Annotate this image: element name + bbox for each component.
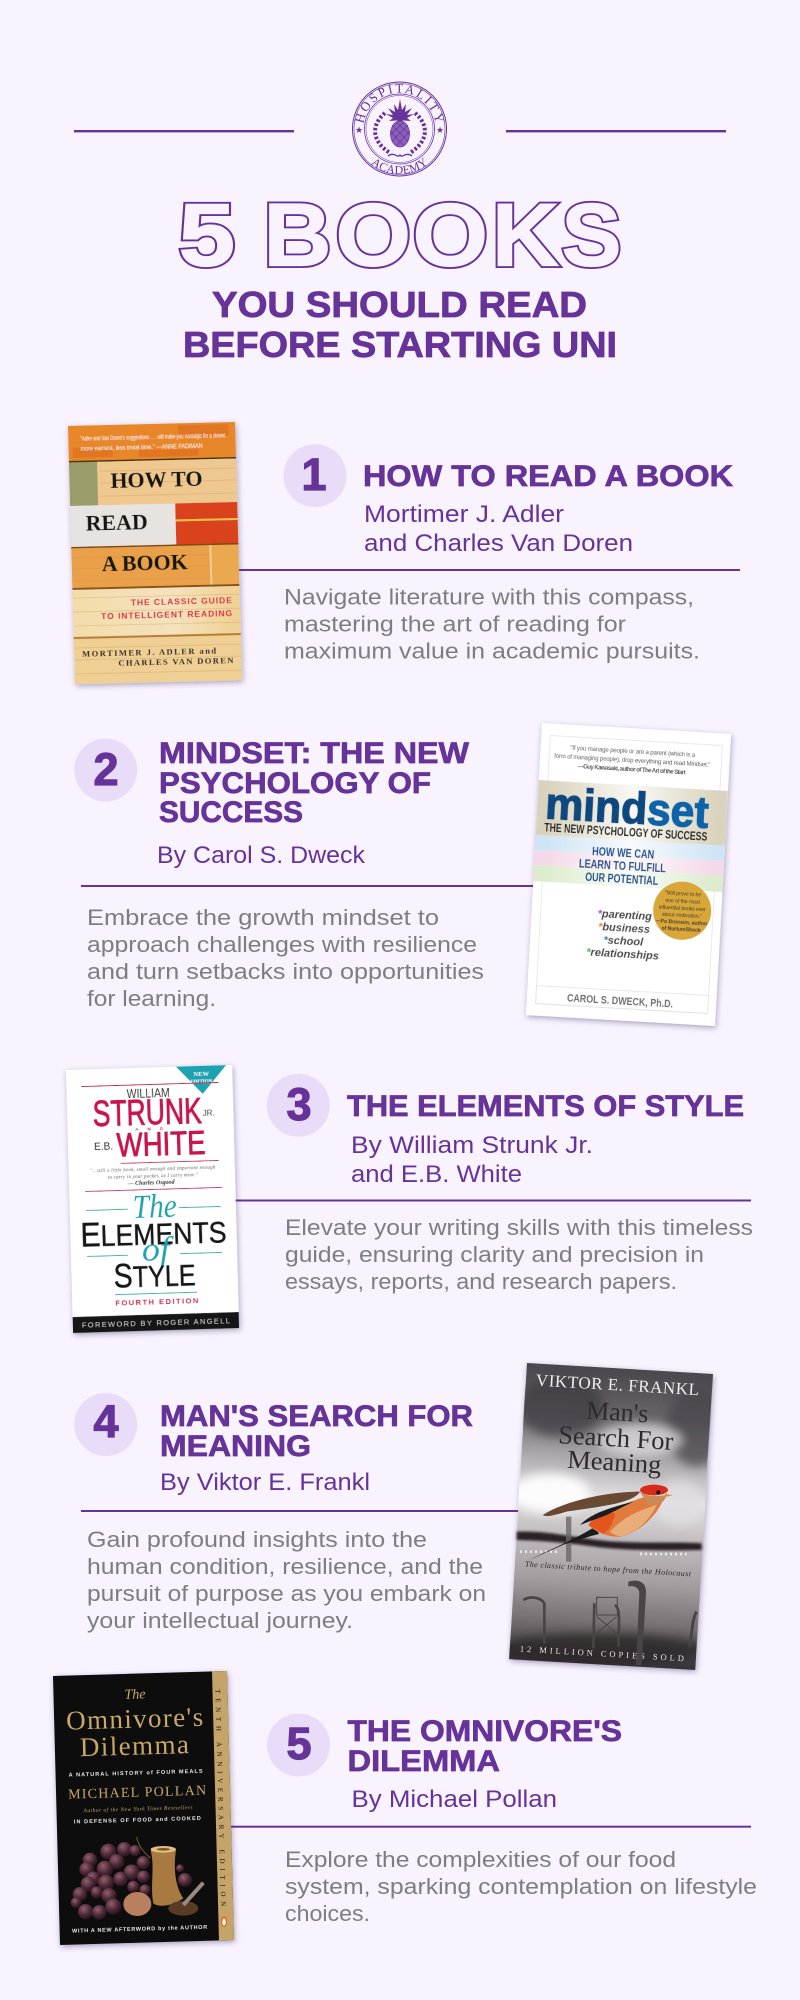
book cover: The Elements of Style: EDITION: [191, 1080, 213, 1085]
author 5: By Michael Pollan: [352, 1786, 557, 1813]
title: 5 BOOKS: K: [492, 184, 559, 284]
book cover: How to Read a Book: THE CLASSIC GUIDE: [131, 595, 232, 608]
book cover: Mindset: *parenting: [597, 908, 652, 923]
author 3: By William Strunk Jr.: [351, 1132, 593, 1159]
description 1: [284, 584, 700, 664]
author 3: [351, 1132, 593, 1188]
title: 5 BOOKS: O: [412, 184, 488, 284]
title: 5 BOOKS: 5: [178, 184, 235, 284]
panel: book 2: [74, 723, 731, 1026]
divider 3: [228, 1200, 751, 1202]
book cover: Mindset: form of managing people), drop everything and read Mindset.": [554, 754, 710, 769]
book cover: The Elements of Style: WHITE: [116, 1124, 206, 1164]
description 2: Embrace the growth mindset to: [87, 905, 439, 930]
book cover: Man's Search for Meaning: Search For: [557, 1420, 675, 1456]
logo: Hospitality Academy seal: ACADEMY: [370, 158, 426, 174]
logo: Hospitality Academy seal: ★: [436, 125, 444, 135]
book cover: Mindset: [526, 723, 731, 1026]
book cover: The Omnivore's Dilemma: IN DEFENSE OF FOOD and COOKED: [74, 1816, 201, 1826]
book cover: Mindset: influential books ever: [659, 904, 706, 913]
number badge 3: [267, 1074, 330, 1137]
book cover: The Elements of Style: JR.: [203, 1109, 215, 1118]
number badge 3: 3: [286, 1079, 312, 1130]
book cover: The Omnivore's Dilemma: Dilemma: [79, 1729, 189, 1762]
divider 4: [81, 1510, 521, 1512]
header rule left: [74, 130, 294, 132]
book cover: Mindset: HOW WE CAN: [592, 844, 655, 862]
book cover: The Elements of Style: FOURTH EDITION: [115, 1296, 198, 1308]
number badge 5: [267, 1714, 330, 1776]
description 5: choices.: [285, 1901, 370, 1926]
title: 5 BOOKS: [178, 184, 622, 284]
description 1: Navigate literature with this compass,: [284, 584, 694, 610]
heading 4: [160, 1400, 473, 1463]
book cover: The Elements of Style: "...still a little book, small enough and important enough: [90, 1166, 216, 1174]
book cover: Man's Search for Meaning: 12 MILLION COPIES SOLD: [520, 1644, 684, 1663]
logo: Hospitality Academy seal: [352, 82, 447, 176]
book cover: The Elements of Style: AND: [135, 1126, 172, 1132]
book cover: Mindset: one of the most: [665, 898, 701, 906]
book cover: The Elements of Style: FOREWORD BY ROGER ANGELL: [82, 1316, 230, 1330]
book cover: The Omnivore's Dilemma: The: [124, 1687, 146, 1703]
header: [74, 82, 726, 365]
title: 5 BOOKS: O: [336, 184, 411, 284]
heading 2: MINDSET: THE NEW: [159, 737, 470, 770]
book cover: How to Read a Book: "Adler and Van Doren's suggestions . . . will make you nostalgic for a slower,: [80, 432, 227, 443]
description 4: Gain profound insights into the: [87, 1527, 427, 1552]
book cover: The Omnivore's Dilemma: MICHAEL POLLAN: [68, 1784, 206, 1803]
panel: book 3: [66, 1065, 753, 1333]
book cover: The Elements of Style: STRUNK: [92, 1090, 202, 1134]
description 2: [87, 905, 484, 1011]
description 3: Elevate your writing skills with this timeless: [285, 1215, 753, 1240]
subtitle: YOU SHOULD READ: [212, 284, 587, 325]
book cover: How to Read a Book: MORTIMER J. ADLER and: [82, 646, 217, 659]
book cover: Man's Search for Meaning: [493, 1363, 727, 1670]
cloud shading: [493, 1377, 727, 1667]
description 1: mastering the art of reading for: [284, 612, 626, 636]
heading 5: DILEMMA: [348, 1745, 500, 1778]
illustration: grapes, bone, egg: [71, 1837, 227, 1927]
book cover: The Elements of Style: STYLE: [113, 1255, 196, 1296]
book cover: Mindset: about motivation.": [662, 912, 702, 920]
title: 5 BOOKS: B: [264, 184, 332, 284]
heading 2: PSYCHOLOGY OF: [159, 767, 431, 800]
number badge 5: 5: [286, 1718, 312, 1769]
title: 5 BOOKS: S: [562, 184, 622, 284]
panel: book 4: [74, 1363, 727, 1670]
description 4: pursuit of purpose as you embark on: [87, 1581, 486, 1606]
book cover: Mindset: LEARN TO FULFILL: [579, 857, 666, 876]
divider 1: [232, 569, 740, 571]
book cover: How to Read a Book: [68, 422, 242, 684]
book cover: How to Read a Book: CHARLES VAN DOREN: [118, 655, 234, 668]
title: 5 BOOKS: K: [492, 184, 559, 284]
heading 2: SUCCESS: [159, 796, 303, 829]
heading 2: [159, 737, 470, 829]
book cover: The Elements of Style: of: [141, 1231, 175, 1269]
author 4: By Viktor E. Frankl: [160, 1469, 370, 1496]
number badge 2: 2: [93, 744, 119, 795]
title: 5 BOOKS: S: [562, 184, 622, 284]
number badge 1: 1: [301, 449, 327, 500]
number badge 4: [74, 1393, 137, 1456]
book cover: Mindset: mindset: [544, 780, 710, 838]
description 2: approach challenges with resilience: [87, 932, 477, 957]
divider 2: [81, 885, 537, 887]
book cover: Mindset: "Will prove to be: [665, 891, 702, 899]
description 4: human condition, resilience, and the: [87, 1554, 483, 1579]
book cover: The Elements of Style: E.B.: [94, 1141, 113, 1153]
book cover: Mindset: *relationships: [586, 946, 659, 962]
title: 5 BOOKS: O: [336, 184, 411, 284]
title: 5 BOOKS: 5: [178, 184, 235, 284]
author 1: Mortimer J. Adler: [364, 501, 564, 528]
heading 4: MAN'S SEARCH FOR: [160, 1400, 473, 1433]
book cover: Mindset: of NurtureShock: [661, 926, 701, 934]
book cover: How to Read a Book: HOW TO: [110, 466, 203, 493]
illustration: swallow on barbed wire: [517, 1485, 702, 1665]
description 2: and turn setbacks into opportunities: [87, 959, 484, 984]
description 3: guide, ensuring clarity and precision in: [285, 1242, 704, 1267]
book cover: Mindset: —Guy Kawasaki, author of The Art of the Start: [578, 764, 686, 776]
description 3: [285, 1215, 753, 1294]
author 1: [364, 501, 633, 557]
book cover: The Omnivore's Dilemma: WITH A NEW AFTERWORD by the AUTHOR: [72, 1925, 207, 1935]
book cover: How to Read a Book: READ: [85, 509, 148, 536]
author 3: and E.B. White: [351, 1161, 522, 1188]
book cover: Man's Search for Meaning: The classic tribute to hope from the Holocaust: [525, 1560, 692, 1578]
logo: Hospitality Academy seal: ★: [355, 125, 363, 135]
book cover: How to Read a Book: TO INTELLIGENT READING: [101, 608, 233, 621]
book cover: Mindset: —Po Bronson, author: [656, 918, 708, 927]
number badge 1: [284, 444, 346, 507]
book cover: Mindset: *business: [598, 921, 650, 936]
book cover: Mindset: *school: [603, 934, 644, 949]
logo: Hospitality Academy seal: HOSPITALITY: [355, 84, 444, 124]
book cover: Mindset: CAROL S. DWECK, Ph.D.: [567, 992, 673, 1010]
author 1: and Charles Van Doren: [364, 530, 633, 557]
heading 4: MEANING: [160, 1430, 311, 1463]
subtitle: [183, 284, 617, 365]
panel: book 5: [53, 1671, 757, 1945]
description 5: system, sparking contemplation on lifestyle: [285, 1874, 757, 1899]
book cover: Man's Search for Meaning: VIKTOR E. FRANKL: [535, 1371, 700, 1399]
heading 5: THE OMNIVORE'S: [348, 1715, 622, 1748]
header rule right: [506, 130, 726, 132]
book cover: Man's Search for Meaning: Man's: [586, 1396, 649, 1428]
description 4: [87, 1527, 486, 1633]
book cover: Mindset: "If you manage people or are a parent (which is a: [570, 746, 696, 759]
description 4: your intellectual journey.: [87, 1608, 353, 1633]
book cover: Man's Search for Meaning: Meaning: [567, 1445, 662, 1479]
book cover: The Omnivore's Dilemma: Omnivore's: [66, 1702, 204, 1736]
description 1: maximum value in academic pursuits.: [284, 638, 700, 664]
title: 5 BOOKS: O: [412, 184, 488, 284]
panel: book 1: [68, 422, 740, 684]
book cover: The Elements of Style: — Charles Osgood: [127, 1180, 176, 1187]
book cover: The Elements of Style: WILLIAM: [126, 1085, 170, 1101]
book cover: The Omnivore's Dilemma: A NATURAL HISTORY of FOUR MEALS: [69, 1769, 203, 1779]
heading 5: [348, 1715, 622, 1778]
book cover: The Elements of Style: to carry in your pocket, as I carry mine.": [108, 1173, 199, 1181]
description 3: essays, reports, and research papers.: [285, 1269, 677, 1294]
subtitle: BEFORE STARTING UNI: [183, 324, 617, 365]
heading 3: THE ELEMENTS OF STYLE: [347, 1090, 744, 1123]
number badge 2: [74, 738, 137, 802]
book cover: Mindset: THE NEW PSYCHOLOGY OF SUCCESS: [544, 820, 708, 844]
book cover: How to Read a Book: A BOOK: [101, 549, 188, 576]
book cover: The Omnivore's Dilemma: [53, 1671, 234, 1945]
book cover: The Omnivore's Dilemma: TENTH ANNIVERSARY EDITION: [213, 1689, 227, 1906]
author 2: By Carol S. Dweck: [157, 842, 366, 869]
book cover: The Omnivore's Dilemma: Author of the New York Times Bestsellers: [82, 1804, 193, 1814]
book cover: The Elements of Style: ELEMENTS: [80, 1212, 227, 1255]
title: 5 BOOKS: B: [264, 184, 332, 284]
book cover: The Elements of Style: NEW: [193, 1071, 210, 1078]
description 5: [285, 1847, 757, 1926]
divider 5: [225, 1826, 751, 1828]
description 2: for learning.: [87, 986, 216, 1011]
heading 1: HOW TO READ A BOOK: [363, 460, 733, 493]
book cover: How to Read a Book: more earnest, less trivial time." —ANNE FADIMAN: [81, 443, 203, 453]
description 5: Explore the complexities of our food: [285, 1847, 676, 1872]
number badge 4: 4: [93, 1396, 119, 1447]
book cover: The Elements of Style: The: [132, 1188, 177, 1226]
book cover: The Elements of Style: [66, 1065, 239, 1333]
book cover: Mindset: OUR POTENTIAL: [585, 870, 659, 888]
